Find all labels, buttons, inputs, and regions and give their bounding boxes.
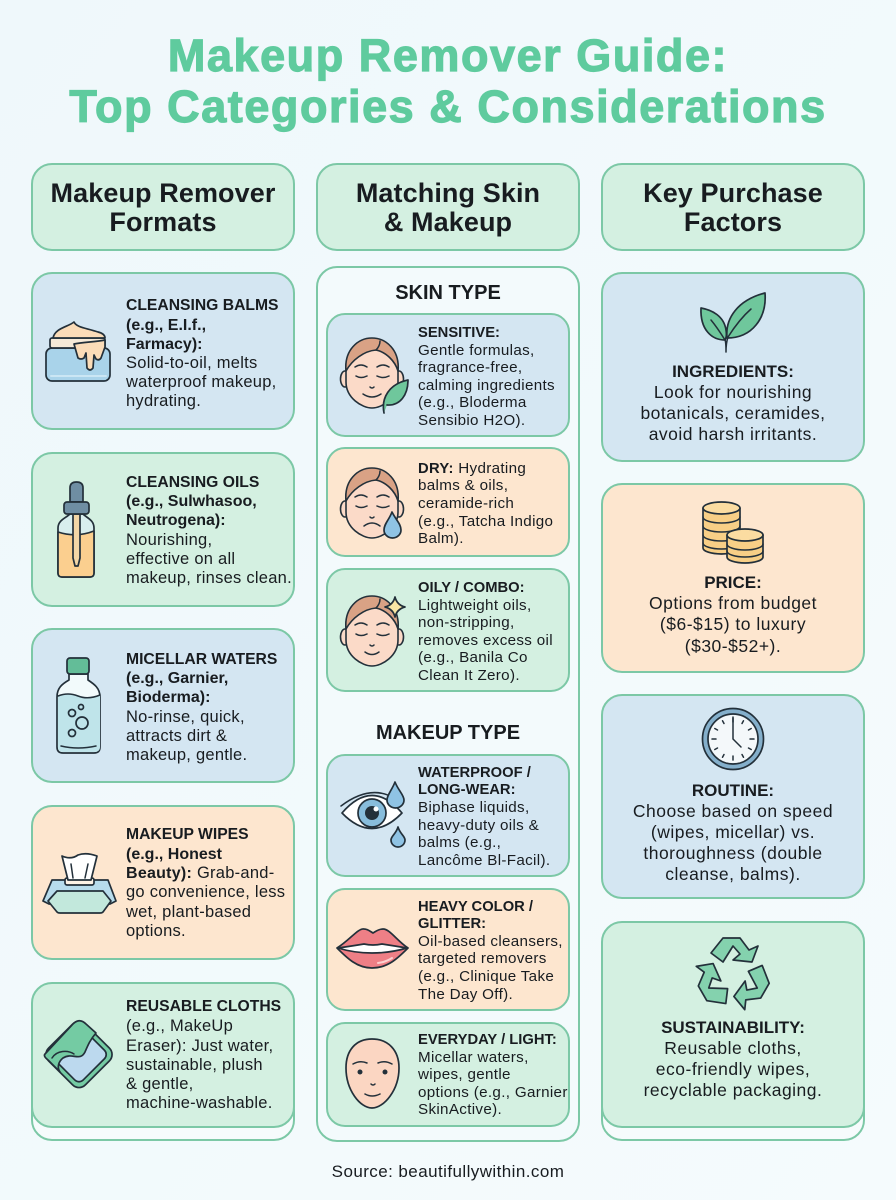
- text: micellar waters: [126, 651, 277, 764]
- icon: lips: [337, 929, 408, 968]
- text: oily combo: Clean It Zero).: [418, 667, 520, 684]
- text: oily combo: (e.g., Banila Co: [418, 649, 528, 666]
- text: heavy color: targeted removers: [418, 950, 547, 967]
- icon: face with leaf: [340, 338, 408, 413]
- text: micellar waters: MICELLAR WATERS: [126, 651, 277, 668]
- heading: makeup remover formats: Formats: [109, 207, 217, 237]
- text: micellar waters: No-rinse, quick,: [126, 708, 245, 726]
- panel: makeup wipes: [32, 806, 294, 959]
- card: sensitive: [327, 314, 569, 436]
- text: waterproof: LONG-WEAR:: [418, 782, 516, 798]
- panel: skin and makeup matching: [317, 267, 579, 1141]
- text: heavy color: HEAVY COLOR /: [418, 899, 533, 915]
- icon: dropper bottle: [58, 482, 94, 577]
- text: sensitive: fragrance-free,: [418, 359, 522, 376]
- icon: wipes pack: [43, 854, 116, 913]
- panel: ingredients: [602, 273, 864, 461]
- text: sustainability: eco-friendly wipes,: [656, 1059, 810, 1079]
- text: sensitive: (e.g., Bloderma: [418, 394, 527, 411]
- card: heavy color: [327, 889, 569, 1010]
- heading: key purchase factors: Key Purchase: [643, 178, 823, 208]
- heading: skin type: SKIN TYPE: [395, 282, 501, 304]
- panel: micellar waters: [32, 629, 294, 782]
- text: dry: (e.g., Tatcha Indigo: [418, 513, 553, 530]
- text: dry: balms & oils,: [418, 477, 508, 494]
- text: everyday: options (e.g., Garnier: [418, 1084, 568, 1101]
- text: waterproof: heavy-duty oils &: [418, 817, 539, 834]
- text: makeup wipes: wet, plant-based: [125, 903, 251, 921]
- icon: face with droplet: [340, 468, 404, 538]
- text: cleansing oils: (e.g., Sulwhasoo,: [126, 493, 257, 510]
- panel: cleansing oils: [32, 453, 294, 606]
- text: reusable cloths: machine-washable.: [126, 1094, 273, 1112]
- icon: face with sparkle: [340, 596, 405, 666]
- panel: cleansing balms: [32, 273, 294, 429]
- heading: matching skin and makeup: & Makeup: [384, 207, 512, 237]
- icon: balm jar: [46, 322, 110, 381]
- text: oily combo: removes excess oil: [418, 632, 553, 649]
- text: sensitive: SENSITIVE:: [418, 325, 500, 341]
- text: cleansing balms: (e.g., E.I.f.,: [126, 317, 206, 334]
- source footer: Source: beautifullywithin.com: [332, 1162, 564, 1181]
- text: reusable cloths: [126, 998, 281, 1112]
- text: cleansing balms: Farmacy):: [126, 336, 202, 353]
- text: ingredients: botanicals, ceramides,: [640, 403, 826, 423]
- text: waterproof: Biphase liquids,: [418, 799, 530, 816]
- title: Top Categories & Considerations: [69, 81, 827, 132]
- text: heavy color: Oil-based cleansers,: [418, 933, 563, 950]
- text: cleansing balms: waterproof makeup,: [125, 373, 277, 391]
- text: waterproof: Lancôme Bl-Facil).: [418, 852, 550, 869]
- text: everyday: EVERYDAY / LIGHT:: [418, 1032, 557, 1048]
- text: sensitive: Gentle formulas,: [418, 342, 535, 359]
- decorative back sheet left: [32, 1090, 294, 1140]
- icon: leaves: [701, 293, 765, 352]
- text: everyday: wipes, gentle: [417, 1066, 511, 1083]
- card: oily combo: [327, 569, 569, 691]
- text: cleansing oils: effective on all: [126, 550, 235, 568]
- card: everyday: [327, 1023, 569, 1126]
- text: price: Options from budget: [649, 593, 817, 613]
- icon: recycle arrows: [689, 938, 775, 1014]
- text: price: ($6-$15) to luxury: [660, 614, 806, 634]
- heading: makeup remover formats: Makeup Remover: [51, 178, 276, 208]
- text: heavy color: The Day Off).: [418, 986, 513, 1003]
- text: cleansing balms: Solid-to-oil, melts: [126, 354, 257, 372]
- text: dry: [418, 460, 553, 547]
- text: ingredients: INGREDIENTS:: [672, 362, 794, 381]
- text: waterproof: balms (e.g.,: [418, 834, 501, 851]
- heading: key purchase factors: Factors: [684, 207, 782, 237]
- icon: eye with droplets: [341, 782, 405, 847]
- title: Makeup Remover Guide:: [168, 30, 728, 81]
- icon: clock: [702, 708, 764, 770]
- text: heavy color: GLITTER:: [418, 916, 486, 932]
- panel: sustainability: [602, 922, 864, 1127]
- text: makeup wipes: go convenience, less: [126, 883, 285, 901]
- text: oily combo: Lightweight oils,: [418, 597, 532, 614]
- icon: bare face: [346, 1039, 399, 1108]
- text: sensitive: [418, 325, 555, 429]
- icon: micellar bottle: [57, 658, 100, 753]
- text: heavy color: [418, 899, 563, 1003]
- decorative back sheet right: [602, 1090, 864, 1140]
- text: sensitive: calming ingredients: [418, 377, 555, 394]
- text: makeup wipes: MAKEUP WIPES: [126, 826, 249, 843]
- panel: price: [602, 484, 864, 672]
- text: price: PRICE:: [704, 573, 762, 592]
- text: routine: Choose based on speed: [633, 801, 833, 821]
- text: oily combo: non-stripping,: [418, 614, 515, 631]
- text: ingredients: avoid harsh irritants.: [649, 424, 817, 444]
- text: dry: DRY: Hydrating: [418, 460, 526, 477]
- text: reusable cloths: (e.g., MakeUp: [126, 1017, 233, 1035]
- text: micellar waters: Bioderma):: [126, 689, 210, 706]
- card: waterproof: [327, 755, 569, 876]
- text: reusable cloths: & gentle,: [126, 1075, 193, 1093]
- text: makeup wipes: options.: [126, 922, 186, 940]
- text: makeup wipes: Beauty): Grab-and-: [126, 864, 274, 882]
- text: dry: ceramide-rich: [418, 495, 514, 512]
- card: dry: [327, 448, 569, 556]
- heading: matching skin and makeup: [317, 164, 579, 250]
- text: waterproof: WATERPROOF /: [418, 765, 531, 781]
- title: [69, 30, 827, 132]
- text: cleansing balms: [125, 297, 279, 410]
- text: waterproof: [418, 765, 550, 869]
- text: routine: ROUTINE:: [692, 781, 774, 800]
- text: heavy color: (e.g., Clinique Take: [418, 968, 554, 985]
- text: sustainability: Reusable cloths,: [664, 1038, 802, 1058]
- heading: key purchase factors: [602, 164, 864, 250]
- text: sensitive: Sensibio H2O).: [418, 412, 525, 429]
- text: reusable cloths: Eraser): Just water,: [126, 1037, 273, 1055]
- text: reusable cloths: REUSABLE CLOTHS: [126, 998, 281, 1015]
- text: ingredients: [640, 362, 826, 444]
- icon: reusable cloth: [42, 1018, 116, 1091]
- text: cleansing oils: makeup, rinses clean.: [126, 569, 292, 587]
- text: cleansing balms: CLEANSING BALMS: [126, 297, 279, 314]
- panel: routine: [602, 695, 864, 898]
- text: routine: (wipes, micellar) vs.: [651, 822, 815, 842]
- text: cleansing oils: Neutrogena):: [126, 512, 226, 529]
- text: price: [649, 573, 817, 656]
- text: everyday: [417, 1032, 568, 1118]
- text: cleansing balms: hydrating.: [126, 392, 201, 410]
- panel: reusable cloths: [32, 983, 294, 1127]
- text: dry: Balm).: [418, 530, 464, 547]
- text: price: ($30-$52+).: [685, 636, 781, 656]
- text: everyday: Micellar waters,: [418, 1049, 529, 1066]
- text: micellar waters: makeup, gentle.: [126, 746, 247, 764]
- text: ingredients: Look for nourishing: [654, 382, 812, 402]
- text: sustainability: recyclable packaging.: [644, 1080, 822, 1100]
- text: micellar waters: attracts dirt &: [126, 727, 227, 745]
- text: cleansing oils: Nourishing,: [126, 531, 212, 549]
- text: oily combo: [418, 580, 553, 684]
- text: micellar waters: (e.g., Garnier,: [126, 670, 228, 687]
- text: cleansing oils: CLEANSING OILS: [126, 474, 259, 491]
- text: cleansing oils: [126, 474, 292, 587]
- text: makeup wipes: [125, 826, 285, 940]
- text: routine: cleanse, balms).: [665, 864, 801, 884]
- text: everyday: SkinActive).: [418, 1101, 502, 1118]
- icon: coin stacks: [703, 502, 763, 563]
- text: oily combo: OILY / COMBO:: [418, 580, 525, 596]
- text: routine: thoroughness (double: [643, 843, 823, 863]
- text: sustainability: SUSTAINABILITY:: [661, 1018, 805, 1037]
- text: makeup wipes: (e.g., Honest: [126, 846, 223, 863]
- text: routine: [633, 781, 833, 884]
- heading: matching skin and makeup: Matching Skin: [356, 178, 540, 208]
- heading: makeup remover formats: [32, 164, 294, 250]
- heading: makeup type: MAKEUP TYPE: [376, 722, 520, 744]
- text: reusable cloths: sustainable, plush: [126, 1056, 263, 1074]
- text: sustainability: [644, 1018, 822, 1100]
